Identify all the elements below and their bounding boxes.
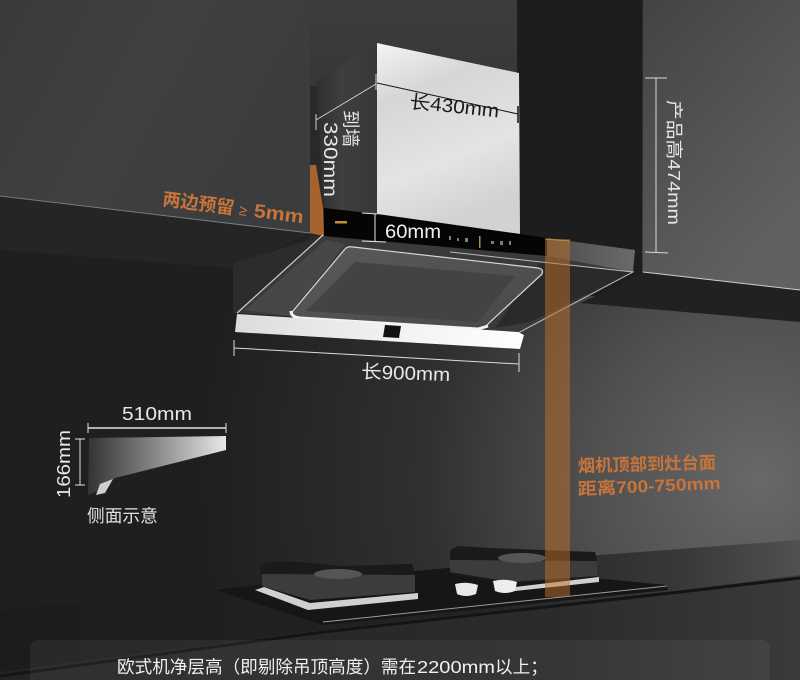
right glass wedge bbox=[495, 262, 633, 328]
hob glass bbox=[215, 566, 668, 625]
back wall above hood bbox=[310, 0, 520, 240]
label: product height: 产品高474mm bbox=[664, 100, 684, 225]
label: 长430mm: 长430mm bbox=[408, 91, 500, 122]
counter front edge bbox=[0, 578, 800, 676]
note text bbox=[117, 657, 548, 677]
label: 到墙: 到墙 bbox=[340, 110, 361, 147]
right glass outline bbox=[450, 252, 633, 333]
right burner bbox=[450, 546, 599, 591]
label: hood to hob distance bbox=[577, 452, 721, 499]
counter top surface bbox=[0, 540, 800, 672]
left glass ledge bbox=[245, 240, 345, 316]
control buttons bbox=[449, 236, 511, 248]
label: 166mm: 166mm bbox=[53, 430, 74, 498]
label: 330mm: 330mm bbox=[319, 122, 340, 197]
hood left side panel bbox=[233, 236, 323, 314]
label: side clearance: 5mm bbox=[253, 201, 305, 228]
steel front bar bbox=[235, 314, 524, 349]
right cabinet edge bbox=[643, 272, 800, 290]
left burner bbox=[255, 562, 418, 610]
dimension: 900mm line bbox=[234, 340, 519, 372]
sensor bbox=[383, 325, 401, 338]
note bar bbox=[30, 640, 770, 680]
hob front edge bbox=[323, 586, 667, 622]
inner filter panel bbox=[292, 247, 542, 329]
label: 510mm: 510mm bbox=[122, 403, 192, 424]
glass outline bbox=[237, 235, 323, 313]
hood right translucent end bbox=[547, 238, 635, 272]
hood chimney steel face bbox=[377, 43, 520, 234]
filter inner shade bbox=[306, 262, 515, 322]
label: side view caption: 侧面示意 bbox=[87, 506, 158, 526]
orange gap strip at wall bbox=[310, 165, 324, 236]
note text: 以上； bbox=[495, 657, 548, 677]
right knob bbox=[493, 580, 517, 593]
label: hood to hob distance: 烟机顶部到灶台面 bbox=[578, 452, 716, 476]
logo bbox=[335, 221, 347, 224]
orange height strip bbox=[545, 239, 570, 597]
left cabinet underside bbox=[0, 196, 310, 268]
dimension: height 474 bbox=[645, 78, 668, 253]
black control band bbox=[324, 208, 547, 256]
glass canopy bbox=[237, 236, 633, 332]
note text: 欧式机净层高（即剔除吊顶高度）需在 bbox=[117, 657, 416, 677]
dimension: 60mm line bbox=[362, 213, 386, 242]
filter lower lip bbox=[291, 311, 488, 329]
counter front face bbox=[0, 575, 800, 680]
label: side clearance bbox=[161, 188, 305, 228]
510mm dimension line bbox=[88, 423, 226, 433]
side view lamp bbox=[96, 479, 113, 495]
right cabinet underside bbox=[580, 272, 800, 322]
label: 60mm: 60mm bbox=[385, 222, 441, 243]
left knob bbox=[455, 583, 478, 596]
label: 长900mm: 长900mm bbox=[361, 361, 451, 386]
chimney shadow gap bbox=[310, 86, 324, 236]
left cabinet edge bbox=[0, 196, 310, 233]
side view silhouette bbox=[88, 436, 226, 495]
dimension: 430mm line bbox=[377, 83, 518, 123]
label: side clearance: 两边预留 bbox=[161, 188, 236, 218]
label: side clearance: ≥ bbox=[238, 202, 248, 220]
left wall cabinet bbox=[0, 0, 310, 233]
166mm dimension line bbox=[75, 439, 85, 485]
label: hood to hob distance: 距离700-750mm bbox=[577, 473, 721, 499]
dimension: 到墙 line bbox=[316, 74, 376, 130]
range hood bbox=[233, 43, 635, 349]
dark centre column bbox=[517, 0, 642, 296]
note text: 2200mm bbox=[417, 657, 495, 677]
gas hob bbox=[215, 546, 668, 625]
right wall cabinet bbox=[643, 0, 800, 290]
note background bbox=[30, 640, 770, 680]
hood chimney left face bbox=[316, 43, 377, 214]
side view diagram bbox=[53, 403, 226, 526]
